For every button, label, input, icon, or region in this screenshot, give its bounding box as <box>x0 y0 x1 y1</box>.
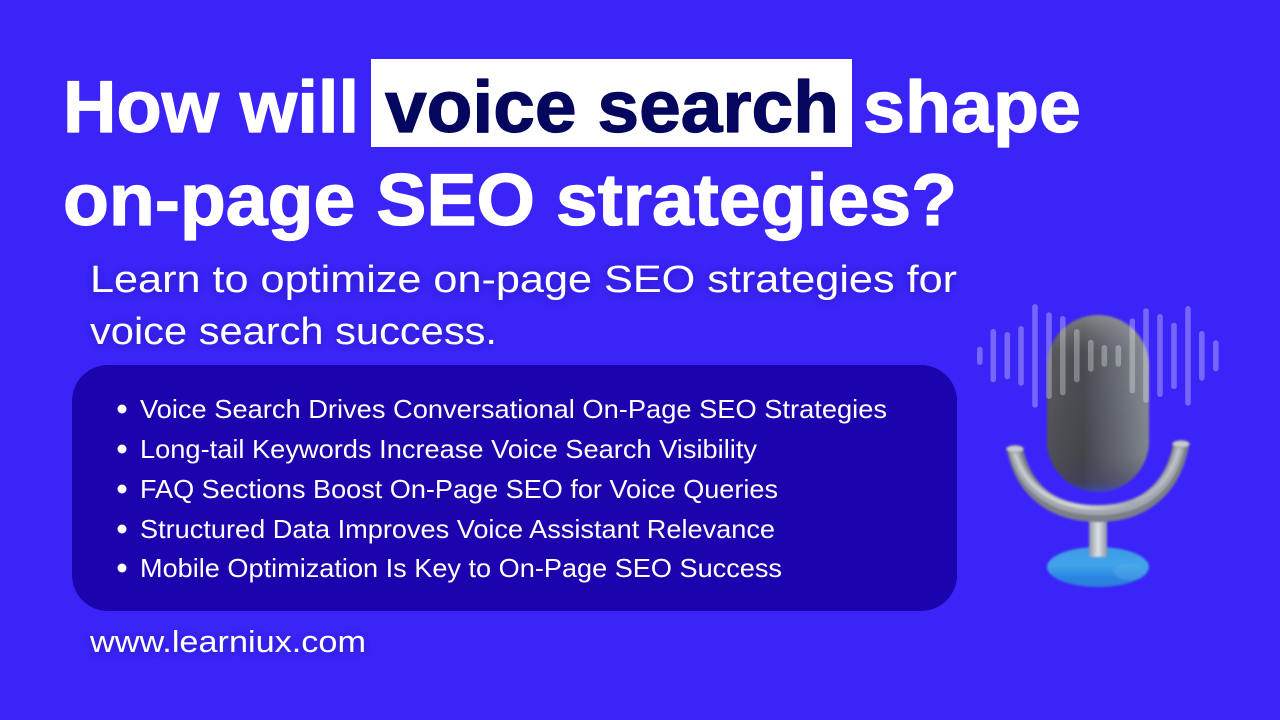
title line two: on-page SEO strategies? <box>63 160 957 241</box>
icon: microphone <box>1006 315 1190 587</box>
title highlight: voice search: voice search <box>385 67 839 148</box>
bullet list: Long-tail Keywords Increase Voice Search Visibility <box>140 434 757 464</box>
subtitle: Learn to optimize on-page SEO strategies for <box>90 259 957 301</box>
mic cradle arc <box>1006 440 1190 514</box>
title word: shape: shape <box>863 67 1081 148</box>
title word: How will: How will <box>63 67 359 148</box>
title <box>63 59 1081 241</box>
panel: key points <box>72 365 957 611</box>
website url: www.learniux.com <box>89 624 366 659</box>
bullet list <box>118 394 887 583</box>
bullet list: Voice Search Drives Conversational On-Page SEO Strategies <box>140 394 887 424</box>
bullet list: FAQ Sections Boost On-Page SEO for Voice Queries <box>140 474 778 504</box>
bullet list: Mobile Optimization Is Key to On-Page SEO Success <box>140 553 782 583</box>
subtitle <box>90 259 957 353</box>
mic body <box>1047 315 1149 492</box>
sound wave bars <box>977 304 1219 408</box>
mic base <box>1047 547 1149 587</box>
mic stem <box>1089 518 1107 557</box>
subtitle: voice search success. <box>90 311 497 353</box>
bullet list: Structured Data Improves Voice Assistant Relevance <box>140 514 775 544</box>
